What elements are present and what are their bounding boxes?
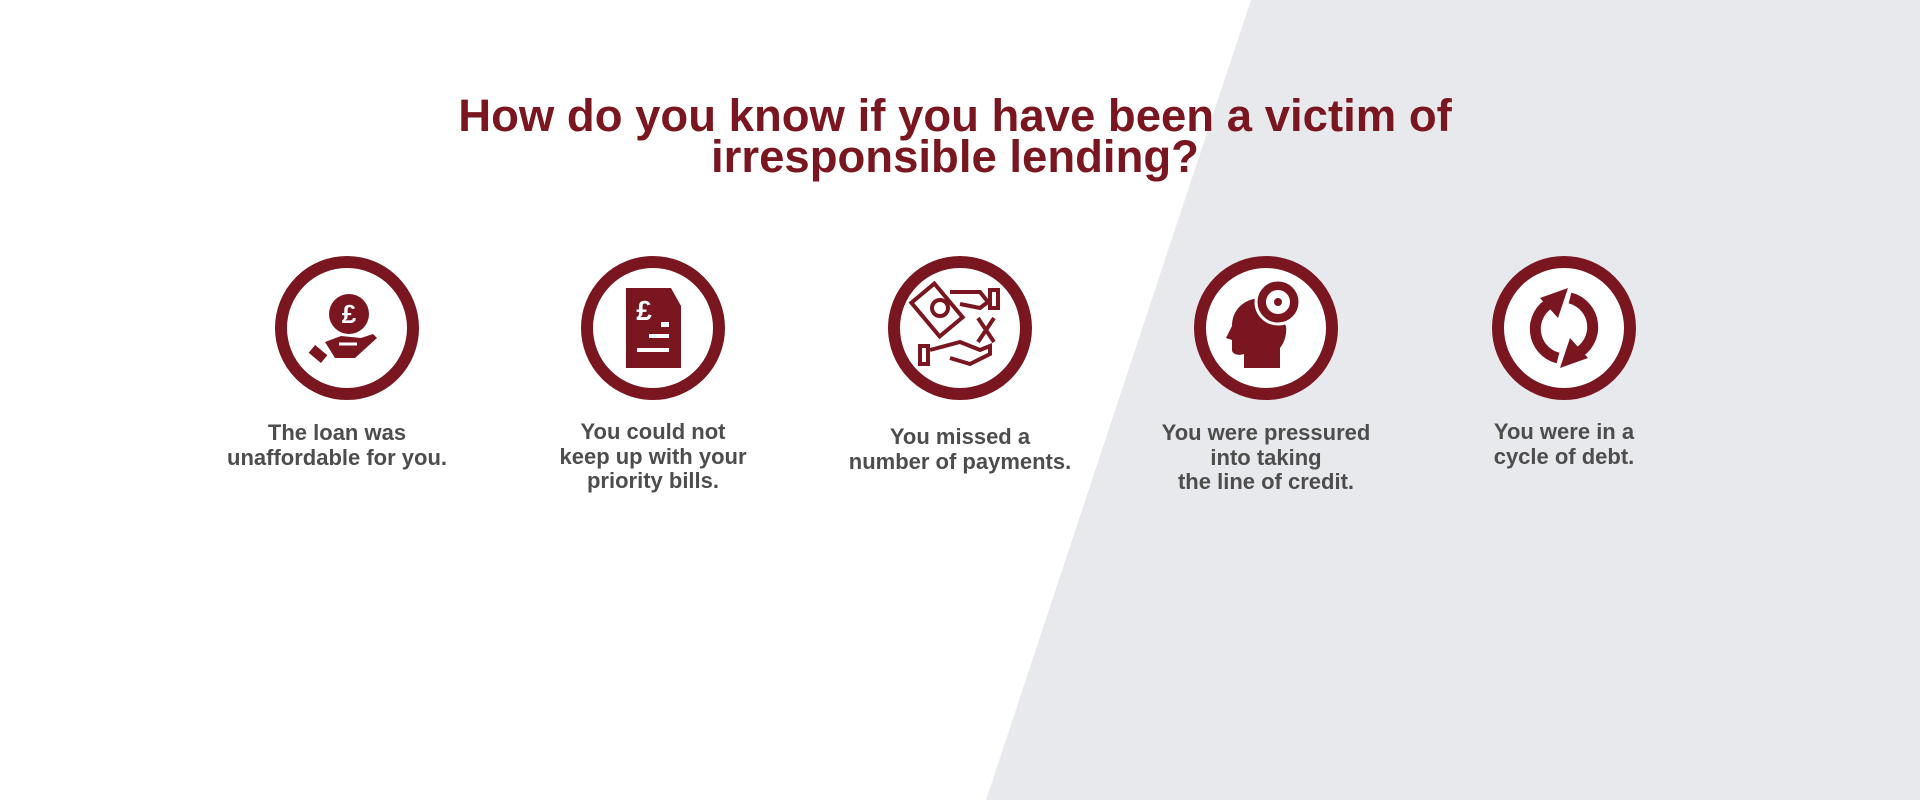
caption [1494,419,1634,468]
item 5: cycle of debt [1492,256,1636,468]
title [458,90,1452,182]
icon: bill document [581,256,725,400]
icon: hand with pound coin [275,256,419,400]
caption [849,424,1071,474]
item 4: pressured [1162,256,1370,494]
caption: unaffordable for you. [227,444,447,470]
item 3: missed payments [849,256,1071,474]
item 2: priority bills [559,256,747,493]
caption [1162,420,1370,494]
icon: head with target [1194,256,1338,400]
caption: You could not [580,419,726,444]
caption: into taking [1210,444,1322,470]
caption: priority bills. [587,468,719,493]
icon: bill document: £ [636,295,652,326]
icon: circular arrows [1492,256,1636,400]
caption: cycle of debt. [1494,444,1634,468]
title: irresponsible lending? [711,131,1199,182]
caption: You were pressured [1162,420,1370,445]
item 1: unaffordable loan [227,256,447,470]
caption: number of payments. [849,448,1071,474]
caption: the line of credit. [1178,469,1354,494]
caption [559,419,747,493]
caption: You were in a [1494,419,1634,444]
title: How do you know if you have been a victim of [458,90,1452,141]
caption [227,420,447,470]
icon: hands exchanging money [888,256,1032,400]
icon: hand with pound coin: £ [342,299,357,329]
caption: You missed a [890,424,1030,449]
caption: The loan was [268,420,406,445]
caption: keep up with your [559,444,747,468]
